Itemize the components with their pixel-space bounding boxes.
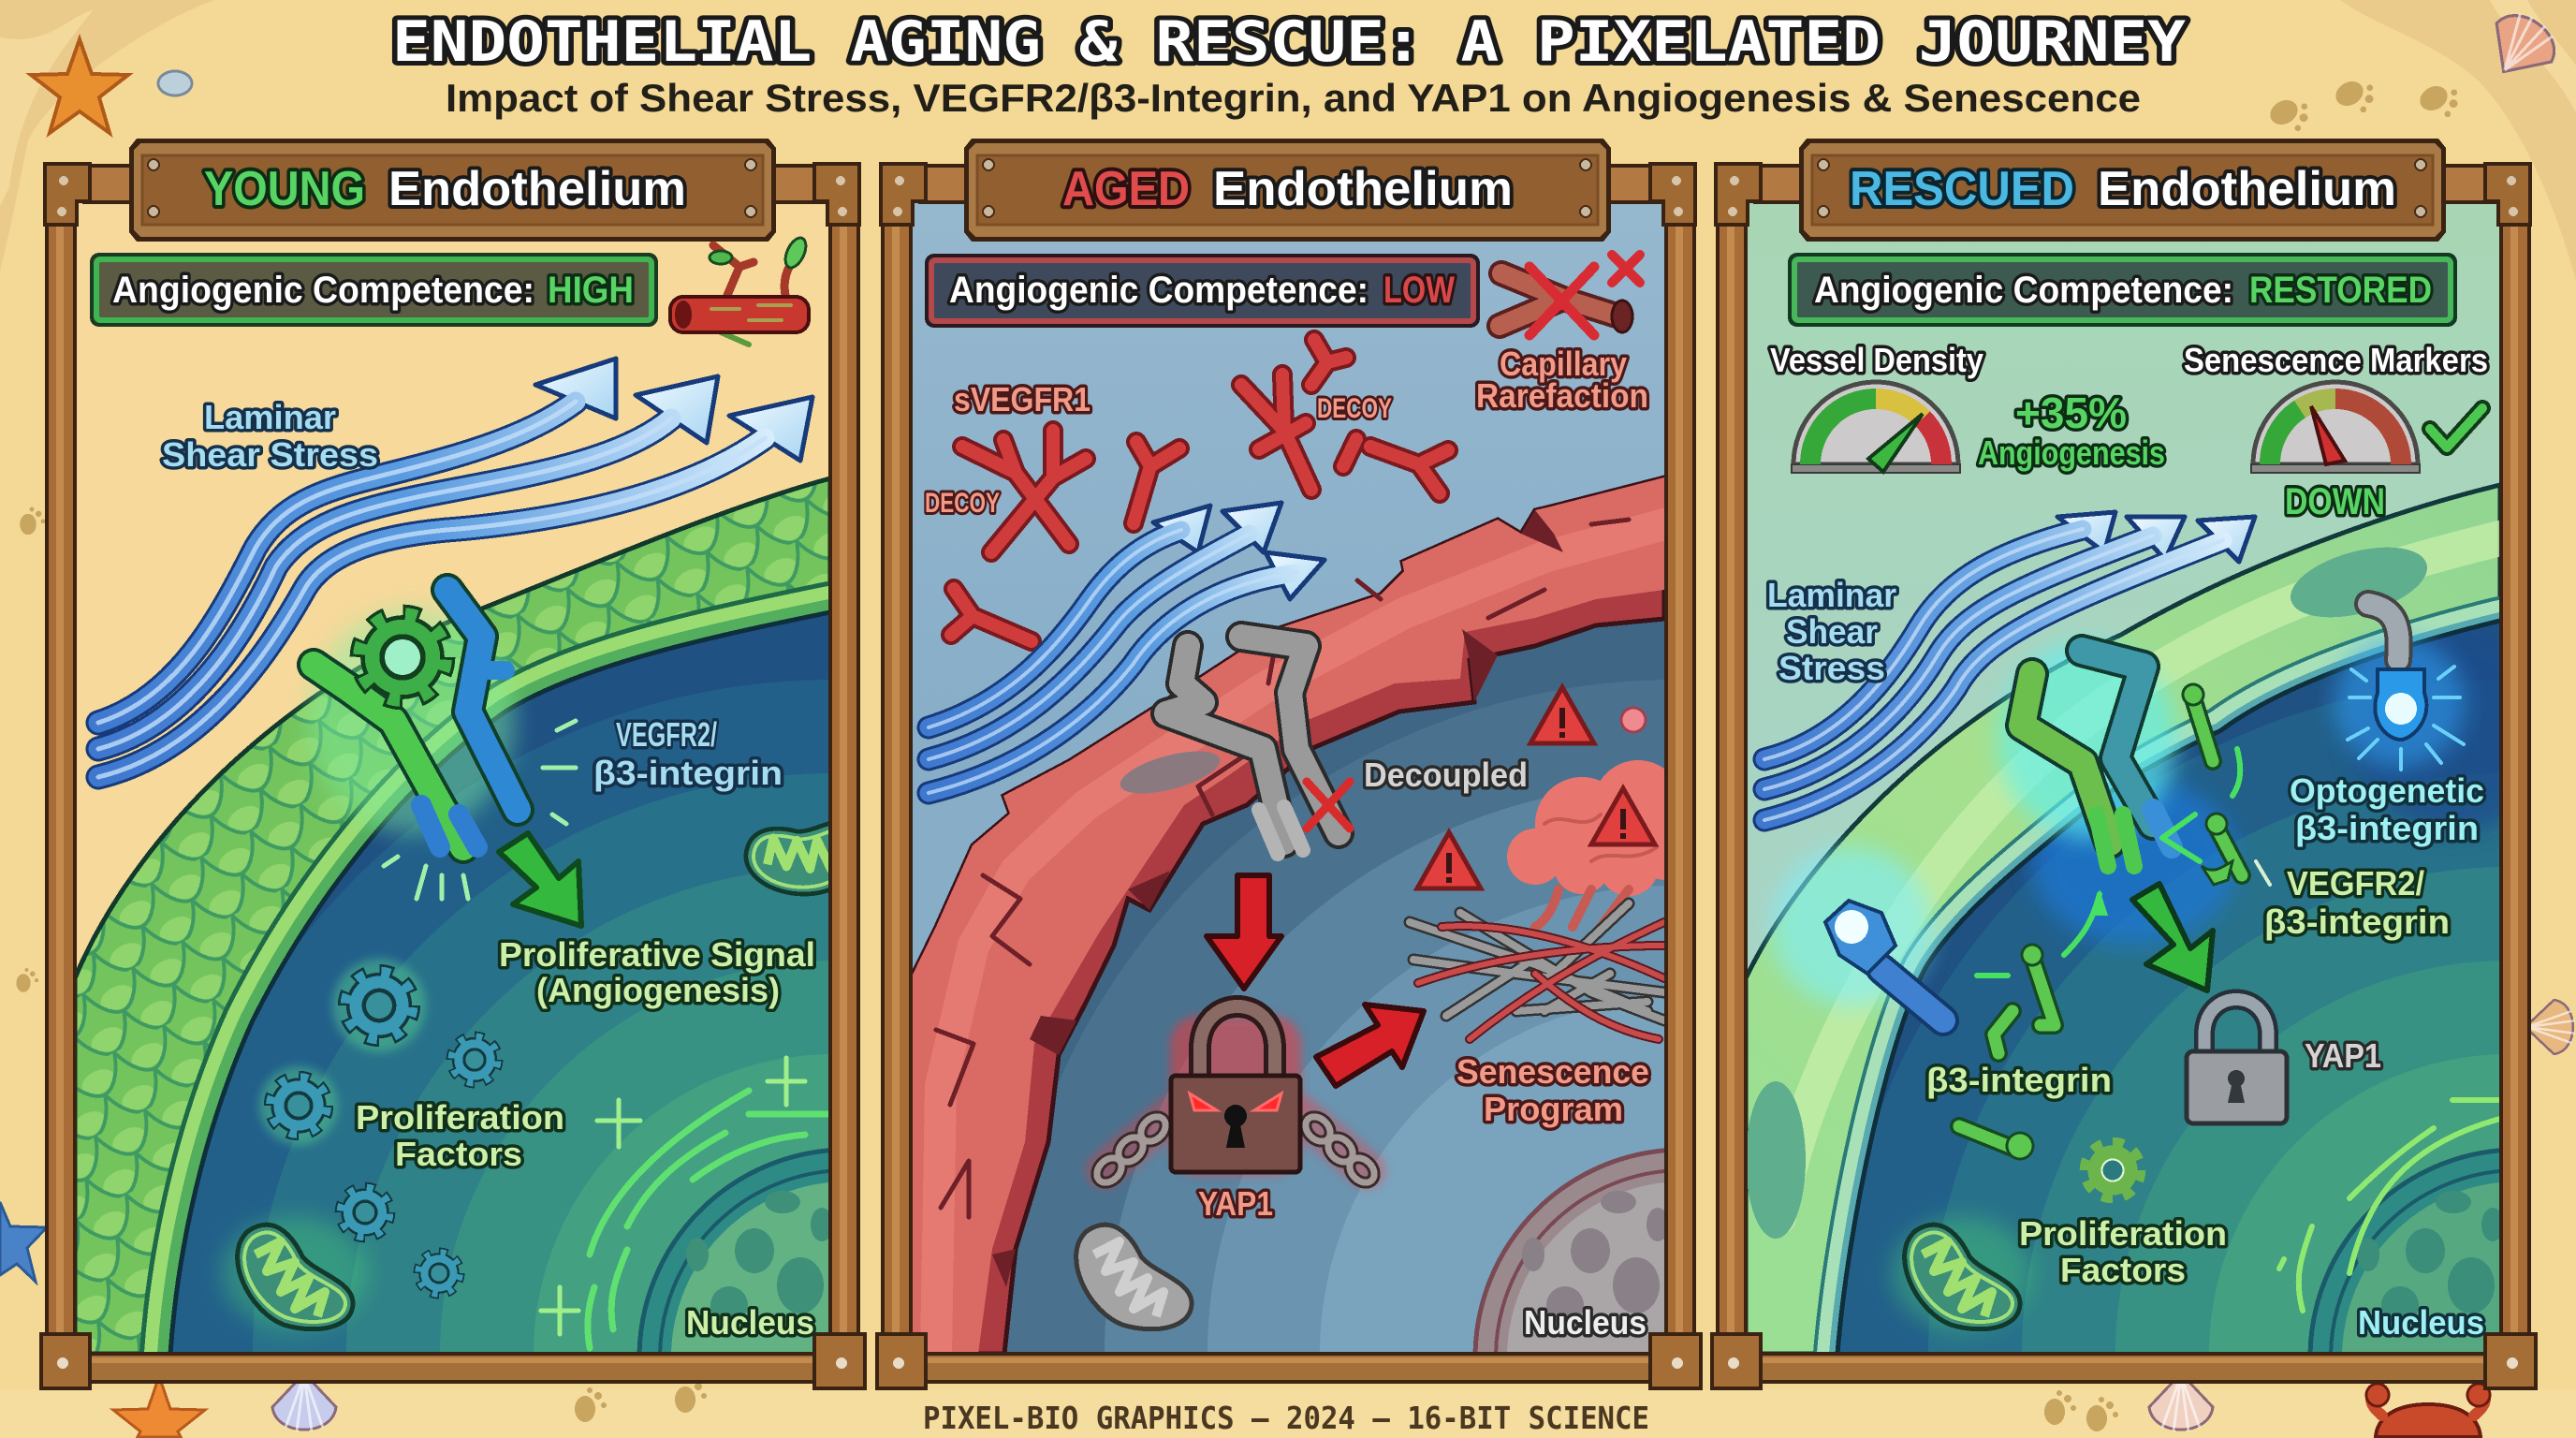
label: nucleus aged: Nucleus	[1524, 1303, 1647, 1342]
label: nucleus: Nucleus	[686, 1303, 814, 1342]
shear stress arrows	[98, 359, 812, 777]
shear stress arrows aged	[929, 503, 1325, 793]
membrane: cracked red	[911, 477, 1664, 1354]
icons: warning triangles	[1417, 687, 1646, 888]
badge: competence restored: Angiogenic Competence:	[1814, 270, 2233, 311]
membrane: healthy green scales	[75, 478, 830, 1354]
icon: orange starfish bottom	[113, 1376, 205, 1437]
label: VEGFR2 beta3 integrin rescued	[2264, 864, 2450, 941]
icons: proliferation factor gears	[259, 959, 496, 1293]
sign: young heading: Endothelium	[388, 162, 686, 216]
gauge: senescence markers	[2251, 382, 2420, 473]
label: proliferation factors rescued: Proliferation	[2019, 1214, 2227, 1253]
label: capillary rarefaction: Rarefaction	[1476, 376, 1648, 415]
icon: decoupled x mark	[1307, 782, 1350, 829]
label: laminar shear stress rescued	[1767, 576, 1896, 687]
icon: grey mitochondrion	[1076, 1225, 1192, 1329]
label: proliferative signal: (Angiogenesis)	[536, 971, 780, 1009]
panel: aged endothelium	[877, 139, 1704, 1388]
label: laminar shear stress rescued: Stress	[1778, 649, 1885, 687]
icon: crab	[2366, 1384, 2490, 1437]
panel background	[1746, 201, 2500, 1354]
panel background	[75, 201, 830, 1354]
label: proliferation factors rescued: Factors	[2060, 1251, 2186, 1289]
label: capillary rarefaction	[1476, 345, 1648, 415]
frame: aged panel	[877, 164, 1701, 1388]
label: decoy left: DECOY	[925, 488, 1000, 519]
sign: rescued heading: RESCUED	[1850, 162, 2074, 216]
sVEGFR1 decoy receptors	[951, 340, 1448, 641]
label: vessel density: Vessel Density	[1770, 341, 1983, 379]
label: senescence program: Program	[1484, 1090, 1623, 1128]
label: senescence program: Senescence	[1456, 1052, 1649, 1091]
nucleus rescued	[2310, 1150, 2518, 1357]
icon: locked yap1 padlock	[1092, 1006, 1379, 1187]
label: VEGFR2 beta3 integrin rescued: VEGFR2/	[2287, 864, 2424, 902]
badge: competence low: LOW	[1383, 270, 1455, 311]
label: beta3 integrin: β3-integrin	[1926, 1061, 2112, 1099]
label: proliferative signal	[499, 935, 815, 1009]
label: laminar shear stress rescued: Shear	[1786, 612, 1878, 651]
icon: blue starfish	[0, 1202, 47, 1282]
nucleus aged	[1475, 1150, 1683, 1357]
membrane: restored pale green	[1746, 485, 2500, 1354]
panel: rescued endothelium	[1712, 139, 2555, 1388]
label: laminar shear stress rescued: Laminar	[1767, 576, 1896, 614]
icon: pebble	[158, 71, 192, 95]
label: VEGFR2 beta3 integrin rescued: β3-integrin	[2264, 902, 2450, 941]
icon: mitochondrion	[222, 1217, 368, 1329]
subtitle: Impact of Shear Stress, VEGFR2/β3-Integrin, and YAP1 on Angiogenesis & Senescence	[446, 76, 2141, 120]
icon: grey yap1 padlock	[2187, 1000, 2287, 1123]
energy arcs rescued	[2279, 1100, 2500, 1311]
label: VEGFR2 beta3 integrin	[593, 715, 783, 792]
cytoplasm bands rescued	[1840, 624, 2499, 1352]
badge: competence high: HIGH	[548, 270, 634, 311]
shear stress arrows rescued	[1764, 512, 2255, 820]
label: optogenetic beta3 integrin: Optogenetic	[2290, 771, 2484, 810]
label: proliferative signal: Proliferative Signal	[499, 935, 815, 974]
panel: young endothelium	[41, 139, 881, 1388]
nucleus	[639, 1150, 847, 1357]
icon: sand shell right	[2525, 1000, 2574, 1054]
arrow: rescued signal down	[2132, 884, 2213, 990]
badge: competence low	[927, 256, 1478, 326]
label: nucleus rescued: Nucleus	[2358, 1303, 2484, 1342]
receptor: rescued VEGFR2 beta3 integrin	[1998, 641, 2176, 866]
energy arcs	[541, 1058, 830, 1348]
sign: rescued heading: Endothelium	[2098, 162, 2396, 216]
label: proliferation factors	[356, 1098, 564, 1173]
label: capillary rarefaction: Capillary	[1500, 345, 1627, 383]
panel background	[911, 201, 1664, 1354]
label: optogenetic beta3 integrin: β3-integrin	[2295, 809, 2479, 847]
label: plus 35 percent angiogenesis: +35%	[2015, 389, 2127, 437]
frame: young panel	[41, 164, 865, 1388]
small beta3 integrin molecules	[1959, 684, 2270, 1159]
badge: competence high	[92, 255, 656, 325]
icon: green check mark	[2430, 408, 2482, 448]
badge: competence low: Angiogenic Competence:	[949, 270, 1368, 311]
arrow: down to yap1	[1207, 875, 1281, 989]
label: proliferation factors: Proliferation	[356, 1098, 564, 1137]
arrow: proliferative signal	[499, 833, 581, 926]
label: VEGFR2 beta3 integrin: VEGFR2/	[616, 715, 717, 754]
sign: young heading: YOUNG	[204, 162, 365, 216]
senescence cloud and tangle	[1410, 760, 1704, 1039]
gauge: vessel density	[1792, 382, 1960, 473]
label: VEGFR2 beta3 integrin: β3-integrin	[593, 754, 783, 792]
sign: rescued heading	[1799, 139, 2446, 242]
cytoplasm gradient bands	[172, 615, 828, 1352]
badge: competence restored: RESTORED	[2249, 270, 2432, 311]
footer credit: PIXEL-BIO GRAPHICS – 2024 – 16-BIT SCIENCE	[923, 1400, 1649, 1436]
label: plus 35 percent angiogenesis	[1978, 389, 2165, 472]
title: ENDOTHELIAL AGING & RESCUE: A PIXELATED JOURNEY	[392, 9, 2186, 75]
icon: healthy capillary log	[670, 235, 810, 345]
label: decoupled: Decoupled	[1364, 756, 1528, 794]
label: proliferation factors rescued	[2019, 1214, 2227, 1289]
icon: mitochondrion rescued	[1892, 1217, 2032, 1329]
label: sVEGFR1: sVEGFR1	[954, 380, 1090, 418]
label: optogenetic beta3 integrin	[2290, 771, 2484, 847]
label: decoy right: DECOY	[1317, 393, 1392, 424]
badge: competence restored	[1790, 255, 2455, 325]
badge: competence high: Angiogenic Competence:	[112, 270, 534, 311]
sign: aged heading	[964, 139, 1611, 242]
sign: aged heading: AGED	[1062, 162, 1190, 216]
icon: starfish top left	[31, 39, 128, 133]
icon: pink shell bottom	[2149, 1373, 2213, 1431]
label: laminar shear stress: Laminar	[204, 398, 336, 436]
sign: young heading	[129, 139, 776, 242]
icon: shell top right	[2476, 3, 2566, 91]
icon: active gear	[362, 617, 443, 697]
arrow: yap1 to senescence	[1316, 1005, 1424, 1086]
label: proliferation factors: Factors	[395, 1135, 522, 1173]
label: down: DOWN	[2285, 481, 2385, 522]
label: yap1 aged: YAP1	[1198, 1184, 1273, 1223]
label: plus 35 percent angiogenesis: Angiogenesis	[1978, 433, 2165, 472]
icon: optogenetic lamp left	[1772, 847, 1943, 1020]
frame: rescued panel	[1712, 164, 2536, 1388]
icon: proliferation gear rescued	[2087, 1145, 2138, 1196]
label: senescence markers: Senescence Markers	[2184, 341, 2488, 379]
receptor: decoupled grey	[1166, 637, 1350, 854]
cytoplasm grey blue bands	[1007, 622, 1664, 1352]
label: laminar shear stress	[162, 398, 378, 474]
label: yap1 rescued: YAP1	[2305, 1036, 2381, 1075]
receptor: VEGFR2 beta3 integrin active	[309, 590, 576, 899]
icon: optogenetic lamp top	[2334, 604, 2465, 770]
label: senescence program	[1456, 1052, 1649, 1128]
icon: mitochondrion right	[743, 822, 828, 897]
icon: capillary rarefaction crossed vessel	[1500, 255, 1640, 335]
sign: aged heading: Endothelium	[1213, 162, 1513, 216]
icon: lilac shell	[272, 1373, 336, 1431]
label: laminar shear stress: Shear Stress	[162, 435, 378, 474]
